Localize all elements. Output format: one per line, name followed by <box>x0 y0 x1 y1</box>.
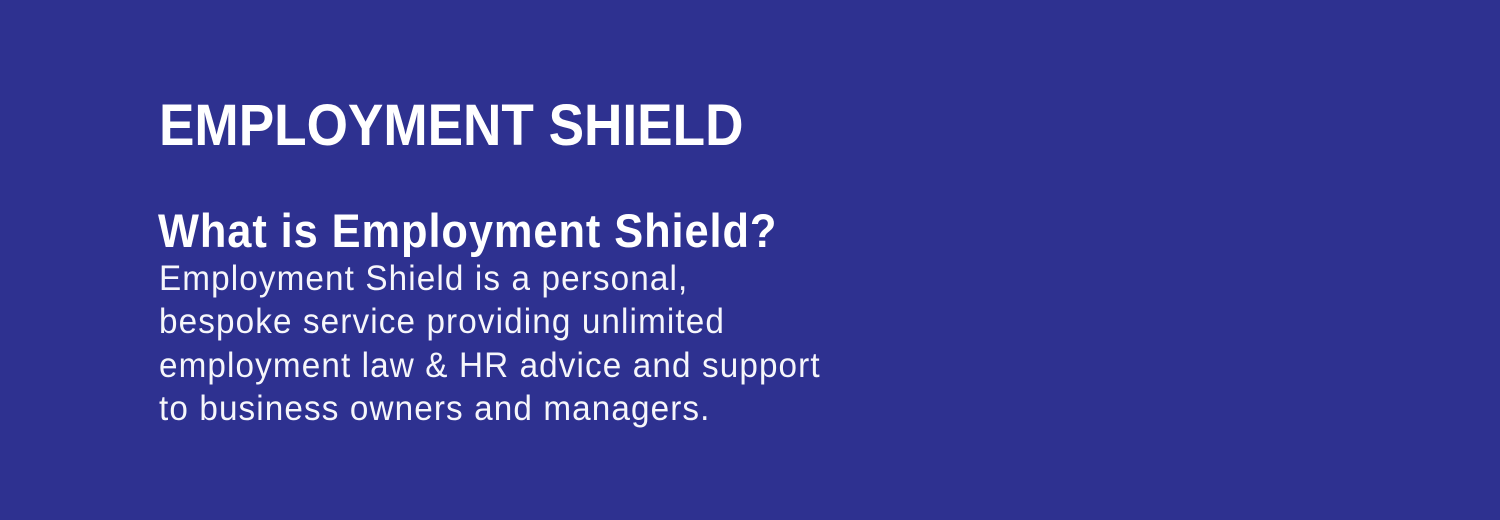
body text <box>159 259 821 428</box>
subheading: What is Employment Shield? <box>158 204 777 257</box>
body text: Employment Shield is a personal, <box>159 259 688 298</box>
title: EMPLOYMENT SHIELD <box>159 93 743 158</box>
body text: to business owners and managers. <box>159 389 711 428</box>
body text: employment law & HR advice and support <box>159 346 821 385</box>
body text: bespoke service providing unlimited <box>159 302 725 341</box>
